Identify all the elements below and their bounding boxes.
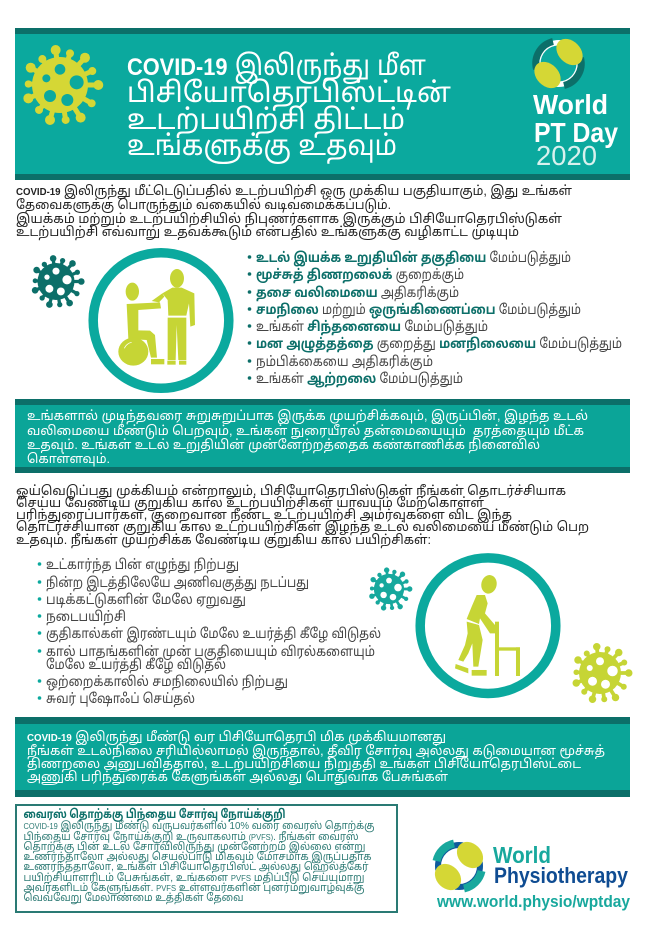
body text: [24, 819, 374, 904]
logo: World Physiotherapy: [430, 837, 631, 911]
panel: stay active: உதவும். உங்கள் உடல் உறுதியின் முன்னேற்றத்தைக் கண்காணிக்க நினைவில்: [27, 437, 540, 453]
panel: post-viral fatigue syndrome: [16, 805, 397, 912]
title: உடற்பயிற்சி திட்டம்: [127, 104, 405, 138]
icon: person walking with support in circle: [420, 558, 556, 694]
header banner: [15, 28, 630, 180]
exercises list: படிக்கட்டுகளின் மேலே ஏறுவது: [46, 592, 246, 609]
body text: பிந்தைய சோர்வு நோய்க்குறி உருவாகலாம் (PVFS). நீங்கள் வைரஸ்: [24, 830, 358, 844]
benefits list: நம்பிக்கையை அதிகரிக்கும்: [256, 354, 433, 371]
panel: stay active: கொள்ளவும்.: [27, 451, 110, 467]
logo: World Physiotherapy: www.world.physio/wptday: [436, 893, 631, 911]
icon: dark virus: [32, 255, 85, 308]
logo: World PT Day 2020: PT Day: [534, 117, 618, 148]
panel: when to stop: [15, 717, 630, 797]
paragraph: short exercise advice: உதவும். நீங்கள் முயற்சிக்க வேண்டிய குறுகிய கால பயிற்சிகள்:: [16, 532, 431, 548]
exercises list: மேலே உயர்த்தி கீழே விடுதல்: [46, 657, 226, 674]
intro text: தேவைகளுக்கு பொருந்தும் வகையில் வடிவமைக்கப்படும்.: [16, 197, 391, 213]
logo: World PT Day 2020: 2020: [536, 140, 597, 171]
body text: உணரந்ததாலோ, உங்கள் பிசியோதெரபிஸ்ட் அல்லது ஹெல்த்கேர்: [24, 860, 369, 874]
heading: post-viral fatigue: வைரஸ் தொற்க்கு பிந்தைய சோர்வு நோய்க்குறி: [24, 807, 286, 822]
body text: தொற்க்கு பின் உடல் சோர்விலிருந்து முன்னேற்றம் இல்லை என்று: [24, 840, 366, 854]
panel: when to stop: COVID-19 இலிருந்து மீண்டு வர பிசியோதெரபி மிக முக்கியமானது: [27, 729, 446, 745]
intro text: உடற்பயிற்சி எவ்வாறு உதவக்கூடும் என்பதில் உங்களுக்கு வழிகாட்ட முடியும்: [16, 224, 519, 240]
benefits list: சமநிலை மற்றும் ஒருங்கிணைப்பை மேம்படுத்தும்: [256, 302, 581, 319]
title: உங்களுக்கு உதவும்: [127, 130, 397, 164]
exercises list: சுவர் புஷோஃப் செய்தல்: [46, 691, 195, 707]
benefits list: தசை வலிமையை அதிகரிக்கும்: [256, 285, 459, 302]
icon: teal virus: [369, 567, 412, 611]
intro text: COVID-19 இலிருந்து மீட்டெடுப்பதில் உடற்பயிற்சி ஒரு முக்கிய பகுதியாகும், இது உங்கள்: [16, 183, 572, 200]
body text: அவர்களிடம் கேளுங்கள். PVFS உள்ளவர்களின் புனர்மறுவாழ்வுக்கு: [24, 881, 364, 895]
benefits list: மூச்சுத் திணறலைக் குறைக்கும்: [256, 267, 464, 284]
paragraph: short exercise advice: பரிந்துரைப்பார்கள், குறைவான நீண்ட உடற்பயிற்சி அமர்வுகளை விட இந்த: [16, 507, 512, 523]
exercises list: நின்ற இடத்திலேயே அணிவகுத்து நடப்பது: [46, 575, 309, 592]
icon: yellow virus: [23, 45, 103, 125]
logo: World PT Day 2020: World: [533, 89, 608, 120]
logo: World PT Day 2020: [529, 34, 618, 171]
body text: பயிற்சியாளரிடம் பேசுங்கள், உங்களை PVFS மதிப்பீடு செய்யுமாறு: [24, 871, 364, 885]
panel: when to stop: அணுகி பரிந்துரைக்க கேளுங்கள் அல்லது பொதுவாக பேசுங்கள்: [27, 769, 448, 786]
body text: வெவ்வேறு மேலாண்மை உத்திகள் தேவை: [24, 891, 244, 904]
benefits list: [248, 250, 622, 388]
exercises list: கால் பாதங்களின் முன் பகுதியையும் விரல்களையும்: [46, 644, 375, 661]
panel: when to stop: நீங்கள் உடல்நிலை சரியில்லாமல் இருந்தால், தீவிர சோர்வு அல்லது கடுமையான மூச்சுத்: [27, 743, 605, 759]
paragraph: short exercise advice: தொடர்ச்சியான குறுகிய கால உடற்பயிற்சிகள் இழந்த உடல் வலிமையை மீண்டும் பெற: [16, 519, 589, 535]
logo: World Physiotherapy: World: [493, 842, 551, 868]
intro text: [16, 183, 572, 240]
benefits list: உங்கள் சிந்தனையை மேம்படுத்தும்: [256, 319, 488, 336]
exercises list: குதிகால்கள் இரண்டயும் மேலே உயர்த்தி கீழே விடுதல்: [46, 626, 381, 643]
panel: when to stop: திணறலை அனுபவித்தால், உடற்பயிற்சியை நிறுத்தி உங்கள் பிசியோதெரபிஸ்ட்டை: [27, 756, 581, 772]
panel: stay active: வலிமையை மீண்டும் பெறவும், உங்கள் நுரையீரல் தன்மையையும் தரத்தையும் மீட்க: [27, 423, 584, 439]
panel: stay active: உங்களால் முடிந்தவரை சுறுசுறுப்பாக இருக்க முயற்சிக்கவும், இருப்பின், இழந்த உடல்: [27, 408, 588, 424]
panel: stay active: [15, 399, 630, 473]
benefits list: மன அழுத்தத்தை குறைத்து மனநிலையை மேம்படுத்தும்: [256, 336, 622, 353]
logo: World Physiotherapy: Physiotherapy: [494, 863, 629, 888]
exercises list: [38, 557, 381, 707]
title: [127, 50, 451, 164]
icon: lime virus: [572, 643, 632, 703]
benefits list: உங்கள் ஆற்றலை மேம்படுத்தும்: [256, 371, 463, 388]
exercises list: நடைபயிற்சி: [46, 609, 126, 626]
benefits list: உடல் இயக்க உறுதியின் தகுதியை மேம்படுத்தும்: [256, 250, 571, 267]
title: பிசியோதெரபிஸ்ட்டின்: [127, 77, 451, 111]
body text: COVID-19 இலிருந்து மீண்டு வருபவர்களில் 10% வரை வைரஸ் தொற்க்கு: [24, 819, 374, 833]
icon: therapist and patient in circle: [93, 253, 229, 388]
paragraph: short exercise advice: ஓய்வெடுப்பது முக்கியம் என்றாலும், பிசியோதெரபிஸ்டுகள் நீங்கள் தொடர்ச்சியாக: [16, 483, 566, 500]
paragraph: short exercise advice: செய்ய வேண்டிய குறுகிய கால உடற்பயிற்சிகள் யாவயும் மேற்கொள்ள: [16, 495, 484, 511]
body text: உணர்ந்தாலோ அல்லது செயல்பாடு மிகவும் மோசமாக இருப்பதாக: [24, 850, 372, 864]
paragraph: short exercise advice: [16, 483, 589, 548]
title: COVID-19 இலிருந்து மீள: [127, 50, 426, 84]
exercises list: ஒற்றைக்காலில் சமநிலையில் நிற்பது: [46, 674, 288, 691]
intro text: இயக்கம் மற்றும் உடற்பயிற்சியில் நிபுணர்களாக இருக்கும் பிசியோதெரபிஸ்டுகள்: [16, 211, 562, 227]
exercises list: உட்கார்ந்த பின் எழுந்து நிற்பது: [46, 557, 239, 574]
